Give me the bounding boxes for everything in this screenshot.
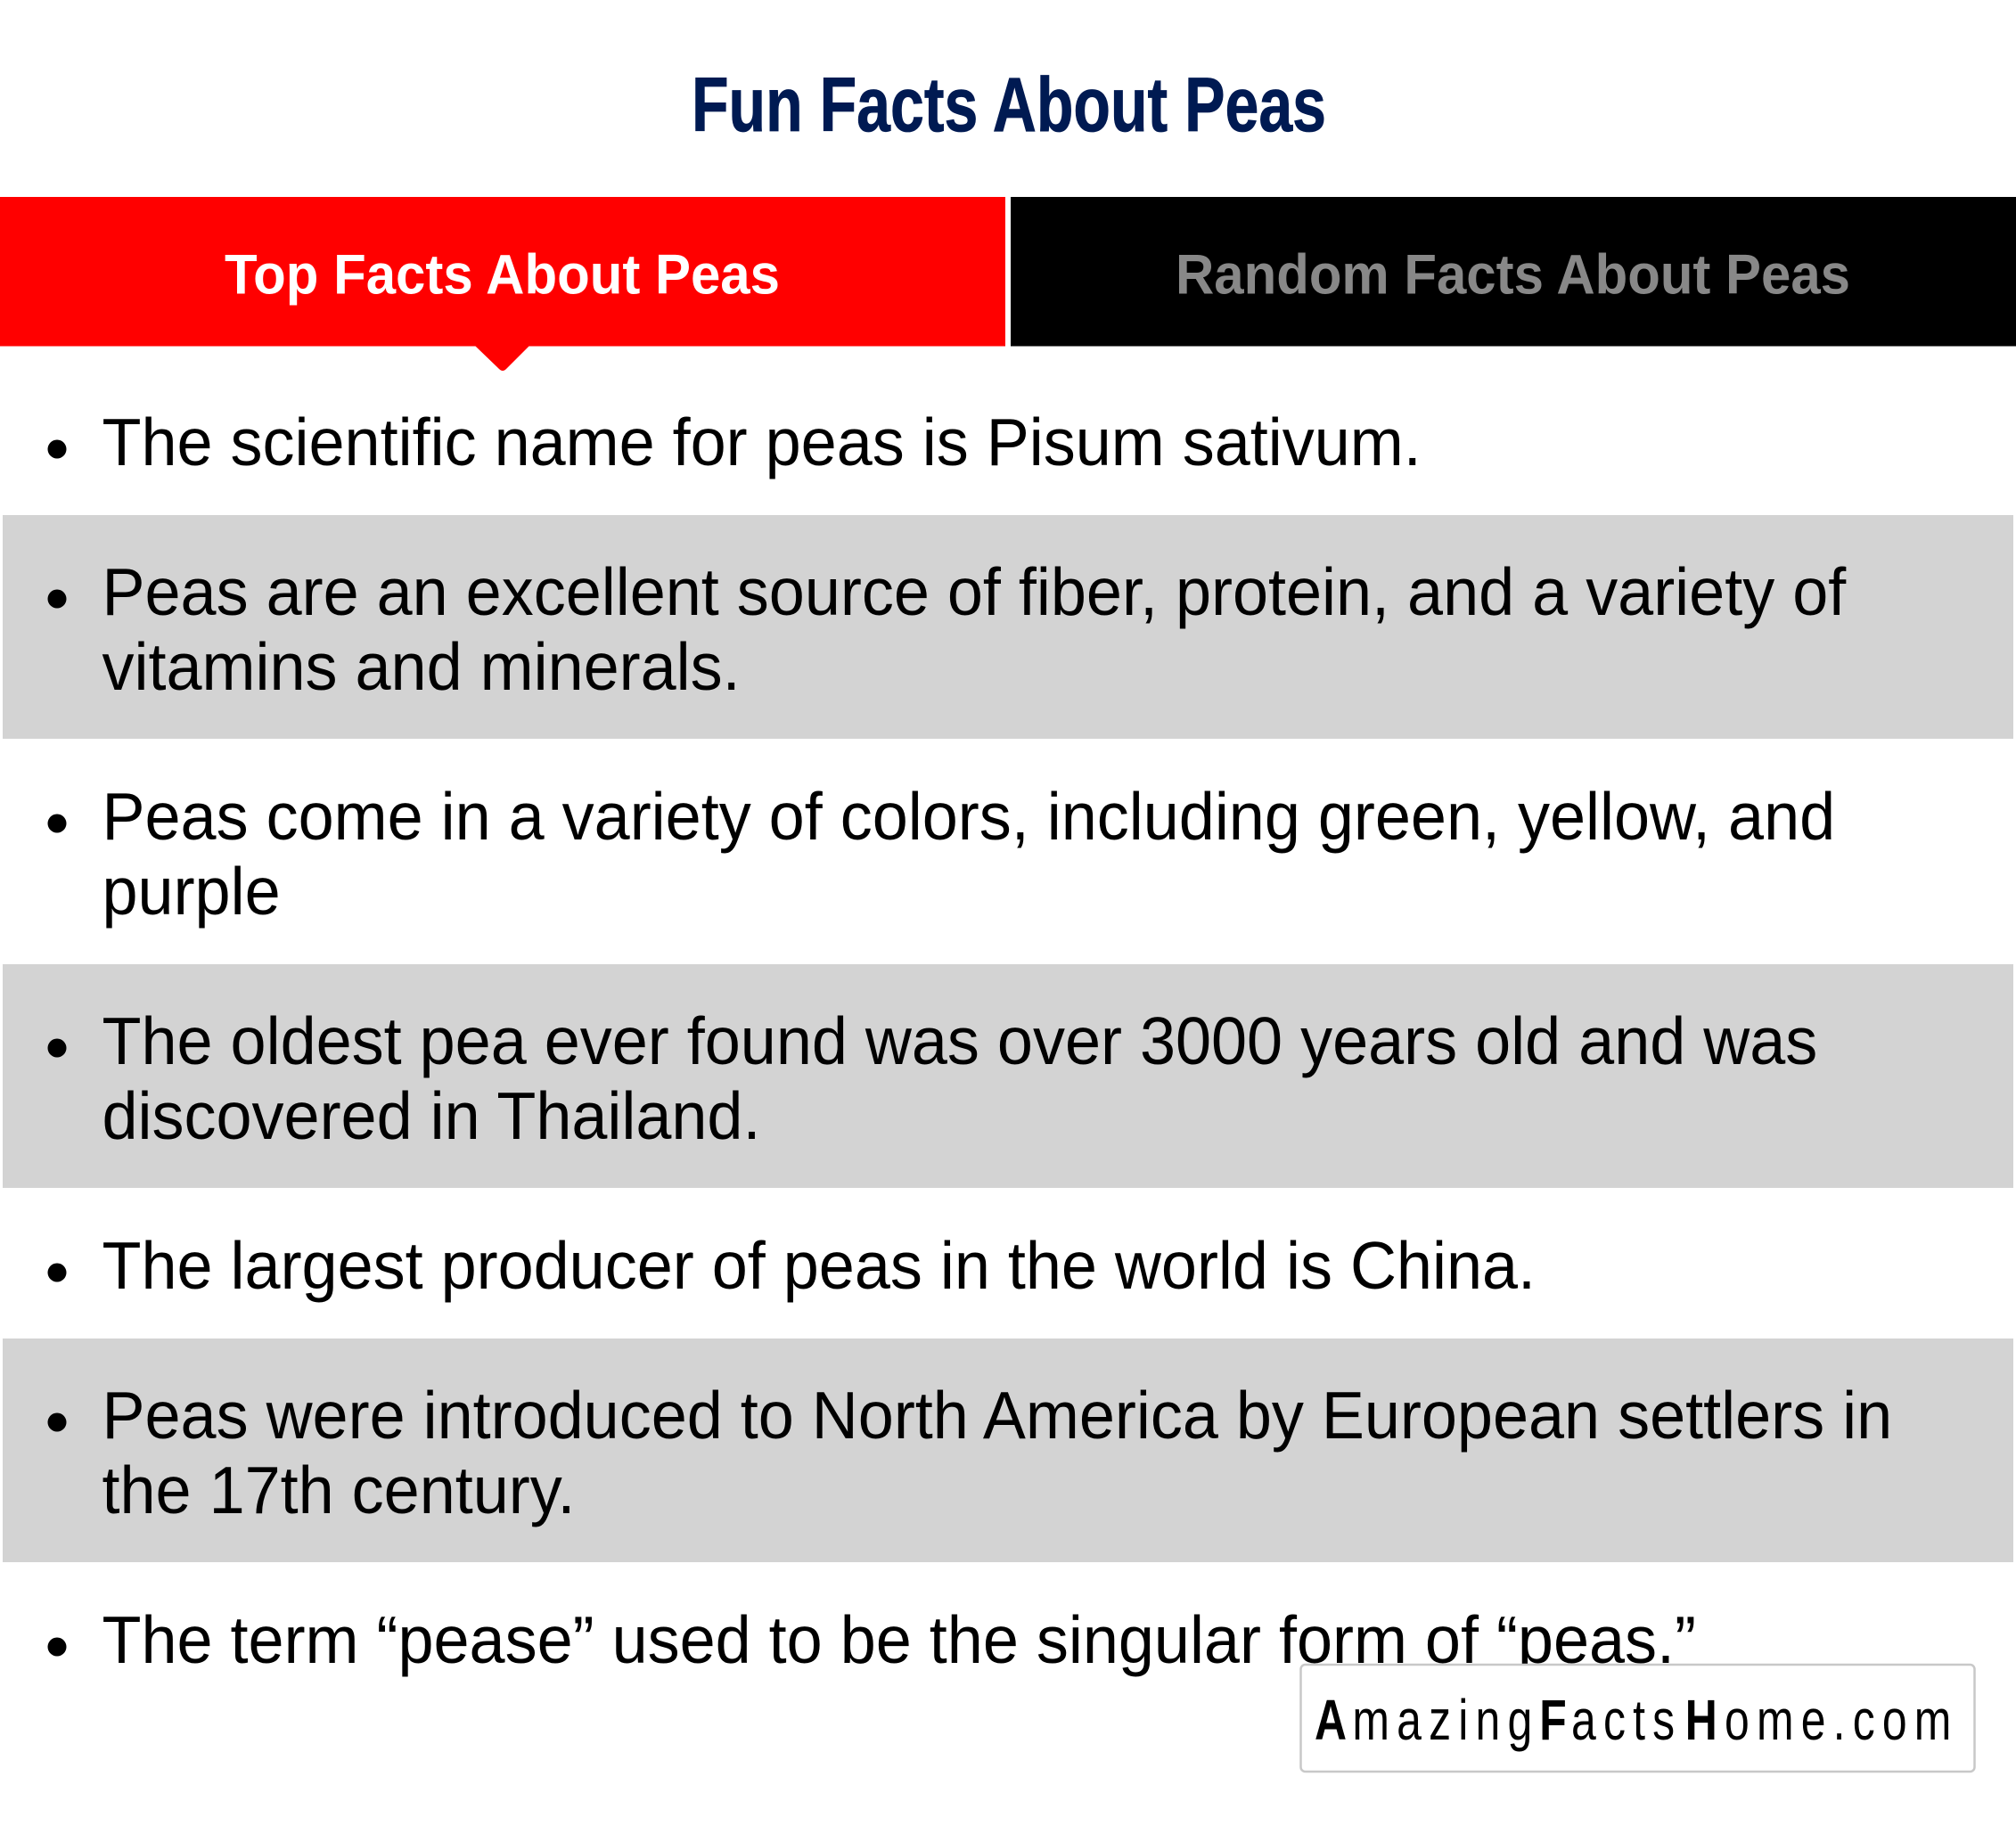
- watermark badge: acts: [1571, 1689, 1682, 1752]
- fact 4: [3, 964, 2013, 1188]
- fact 2: Peas are an excellent source of fiber, protein, and a variety of: [102, 554, 1847, 629]
- watermark badge: ome.com: [1725, 1689, 1959, 1752]
- fact 2: vitamins and minerals.: [102, 629, 741, 704]
- fact 6: the 17th century.: [102, 1453, 575, 1527]
- fact 3: Peas come in a variety of colors, including green, yellow, and: [102, 779, 1835, 854]
- watermark badge: A: [1315, 1689, 1354, 1752]
- watermark badge: [1301, 1665, 1975, 1772]
- fact 5: The largest producer of peas in the world is China.: [102, 1228, 1536, 1303]
- watermark badge: H: [1685, 1689, 1725, 1752]
- watermark badge: F: [1539, 1689, 1574, 1752]
- fact 3: [48, 779, 1835, 929]
- tab: top facts (active): Top Facts About Peas: [225, 244, 780, 307]
- title: Fun Facts About Peas: [692, 62, 1326, 148]
- tab: random facts (inactive): Random Facts About Peas: [1176, 244, 1850, 307]
- fact 4: discovered in Thailand.: [102, 1078, 760, 1153]
- tab: top facts (active): [0, 197, 1005, 371]
- fact 1: The scientific name for peas is Pisum sativum.: [102, 405, 1422, 479]
- fact 6: Peas were introduced to North America by European settlers in: [102, 1378, 1892, 1453]
- tab: random facts (inactive): [1011, 197, 2016, 346]
- fact 6: [3, 1339, 2013, 1562]
- fact 7: The term “pease” used to be the singular form of “peas.”: [102, 1602, 1696, 1677]
- watermark badge: mazing: [1352, 1689, 1539, 1752]
- fact 4: The oldest pea ever found was over 3000 years old and was: [102, 1003, 1817, 1078]
- fact 2: [3, 515, 2013, 739]
- fact 3: purple: [102, 854, 281, 929]
